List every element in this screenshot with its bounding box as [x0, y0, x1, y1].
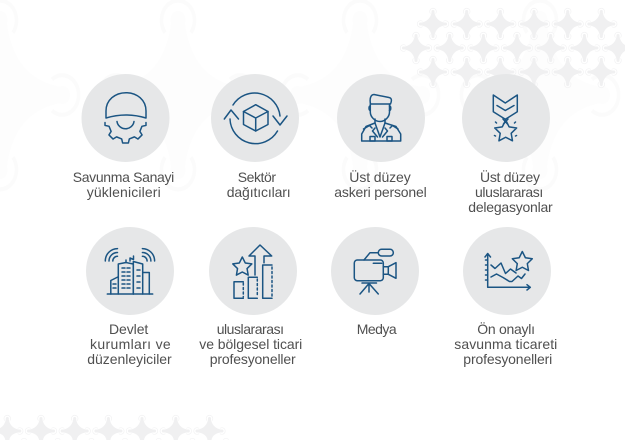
panel: Medya: [331, 227, 419, 337]
label: Üst düzey: [480, 168, 540, 185]
icon: helmet and gear: [105, 93, 146, 143]
icon: soldier: [362, 94, 401, 141]
label: savunma ticareti: [454, 336, 557, 352]
label: profesyoneller: [210, 351, 296, 367]
label: Medya: [357, 321, 397, 337]
label: düzenleyiciler: [87, 351, 172, 367]
panel: Ön onaylı savunma ticareti profesyonelleri: [454, 227, 557, 367]
background: small drone pattern bottom left: [0, 415, 229, 440]
panel: Üst düzey uluslararası delegasyonlar: [462, 74, 553, 215]
icon: cube with cycle arrows: [224, 93, 287, 144]
label: [334, 168, 427, 200]
icon: line chart with star: [485, 252, 532, 290]
label: Ön onaylı: [477, 320, 535, 337]
label: delegasyonlar: [468, 199, 553, 215]
background: small drone pattern top right: [400, 8, 625, 88]
label: ve bölgesel ticari: [199, 336, 302, 352]
panel: uluslararası ve bölgesel ticari profesyoneller: [199, 227, 302, 367]
background: large faint drone pattern: [0, 1, 619, 189]
label: uluslararası: [217, 321, 284, 337]
panel: Savunma Sanayi yüklenicileri: [73, 74, 174, 200]
label: kurumları ve: [90, 336, 171, 352]
label: yüklenicileri: [87, 184, 161, 200]
label: [73, 169, 174, 200]
label: [199, 321, 302, 367]
label: askeri personel: [334, 184, 427, 200]
label: profesyonelleri: [463, 351, 552, 367]
label: [454, 320, 557, 367]
label: [468, 168, 553, 215]
label: Üst düzey: [349, 168, 411, 185]
label: [227, 169, 291, 200]
label: [87, 321, 172, 367]
panel: Sektör dağıtıcıları: [211, 74, 299, 200]
panel: Devlet kurumları ve düzenleyiciler: [86, 227, 174, 367]
label: uluslararası: [475, 184, 543, 200]
icon: city buildings with signal arcs: [105, 249, 155, 294]
label: dağıtıcıları: [227, 184, 291, 200]
icon: medal with chevrons and star: [493, 95, 517, 141]
panel: Üst düzey askeri personel: [334, 74, 427, 200]
label: Sektör: [238, 169, 276, 185]
label: Savunma Sanayi: [73, 169, 174, 185]
label: Devlet: [109, 321, 148, 337]
icon: video camera on tripod: [354, 249, 396, 294]
icon: rising bars with arrow and star: [233, 245, 272, 298]
